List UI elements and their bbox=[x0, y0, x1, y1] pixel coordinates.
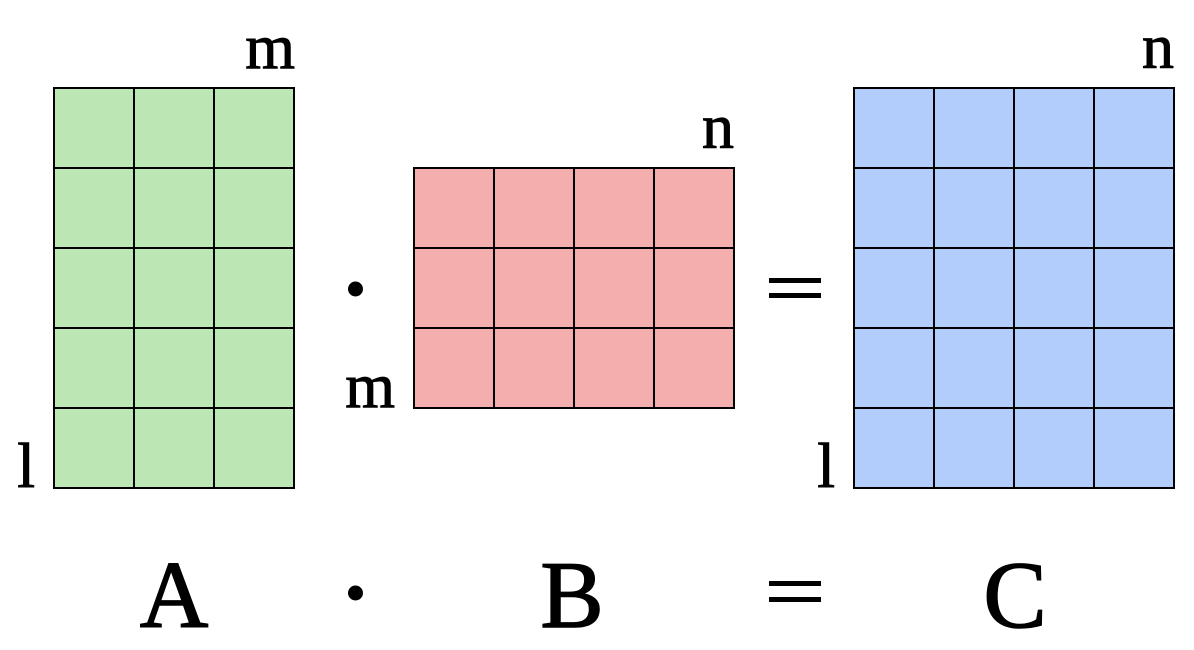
label: l beside C: l bbox=[817, 430, 835, 501]
formula letter B: B bbox=[540, 542, 604, 648]
formula letter A: A bbox=[140, 542, 208, 648]
label: l beside A: l bbox=[17, 430, 35, 501]
label: m beside B: m bbox=[345, 350, 395, 421]
formula letter C: C bbox=[983, 542, 1047, 648]
label: n above B: n bbox=[702, 91, 734, 162]
matrix C: blue 5x4 grid bbox=[854, 88, 1174, 488]
multiplication dot between matrices bbox=[348, 282, 363, 296]
formula multiplication dot bbox=[348, 586, 363, 600]
label: n above C: n bbox=[1142, 11, 1174, 82]
equals sign between matrices bbox=[769, 278, 821, 298]
matrix B: red 3x4 grid bbox=[414, 168, 734, 408]
matrix A: green 5x3 grid bbox=[54, 88, 294, 488]
label: m above A: m bbox=[245, 11, 295, 82]
formula equals sign bbox=[769, 581, 821, 602]
